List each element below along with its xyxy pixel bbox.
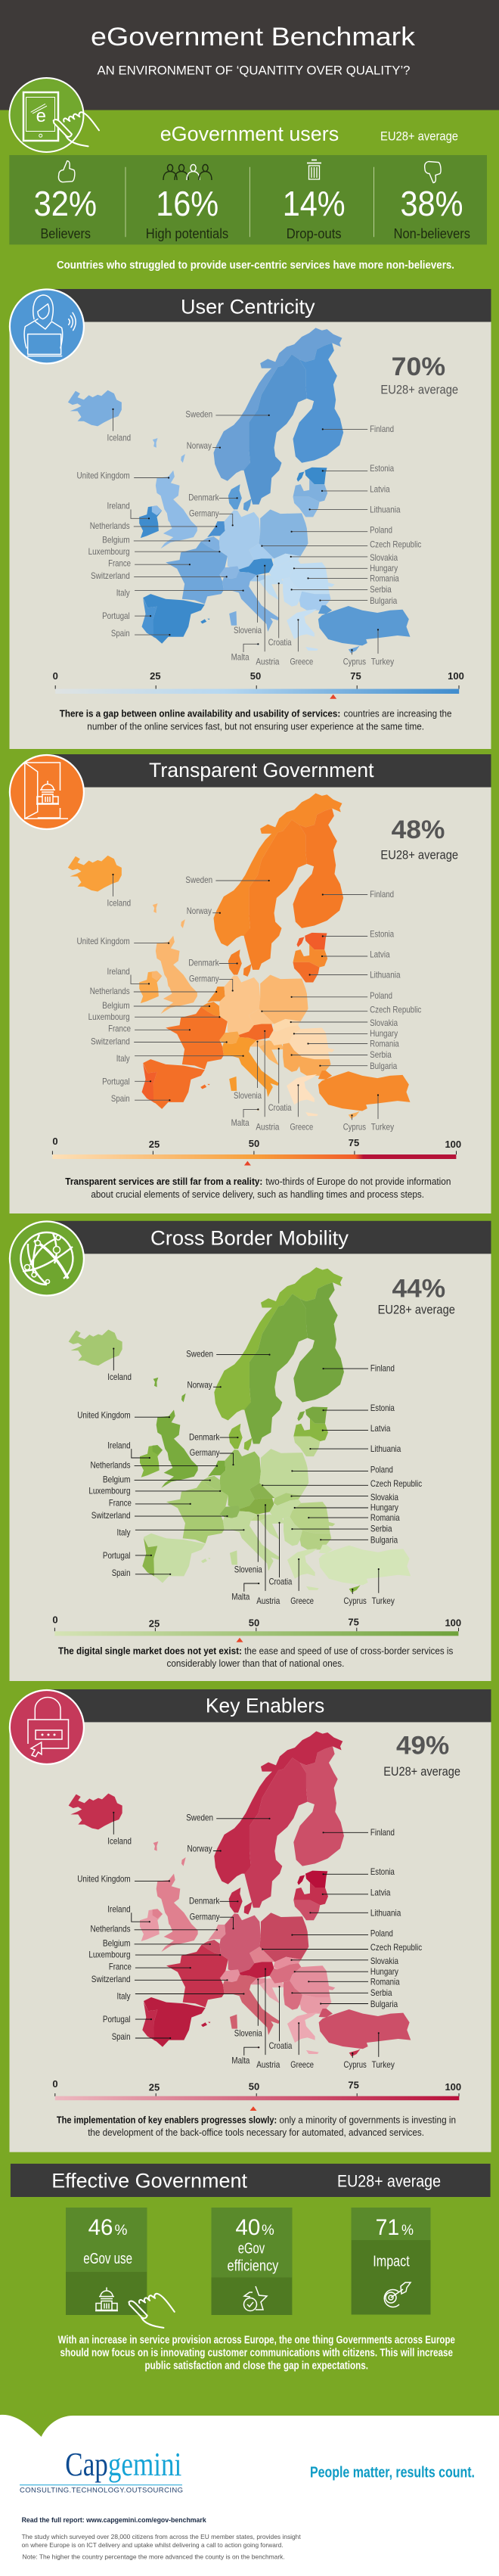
map: Europe key enablers: Slovenia [234,2028,262,2039]
icon: thumbs up [58,161,75,182]
map: Europe user centricity: Estonia [370,463,394,474]
map: Europe transparent government: Turkey [371,1121,394,1132]
map: Europe user centricity: Switzerland [91,570,130,581]
card: eGov efficiency: eGov [238,2241,265,2257]
card: Impact: 71 [376,2215,399,2240]
map: Europe transparent government: Hungary [370,1028,398,1039]
map: Europe user centricity: Bulgaria [370,595,398,606]
footer notes: Read the full report: www.capgemini.com/egov-benchmark [22,2516,206,2525]
stat: believers: Believers [41,226,91,241]
card: Impact: Impact [373,2254,410,2270]
map: Europe cross border mobility: Germany [190,1447,219,1458]
map: Europe transparent government: Serbia [370,1049,392,1060]
map: Europe cross border mobility: Iceland [107,1372,132,1382]
caption: gap between availability and usability: number of the online services fast, but not ensuring user experience at the same time. [87,720,424,732]
icon: trash bin [307,160,321,179]
map: Europe key enablers: Croatia [269,2040,293,2051]
map: Europe transparent government: Romania [370,1038,399,1049]
map: Europe key enablers: Romania [370,1976,400,1987]
map: Europe user centricity: Ireland [107,501,130,511]
map: Europe user centricity: Italy [116,588,130,598]
map: Europe key enablers: Iceland [107,1835,132,1846]
map: Europe cross border mobility: Italy [116,1527,130,1537]
map: Europe user centricity: Greece [290,656,313,667]
scale bar with average marker: 0 [53,670,58,682]
scale bar with average marker: 0 [52,1136,58,1147]
map: Europe key enablers: Sweden [186,1813,213,1823]
map: Europe transparent government: Finland [370,889,394,900]
map: Europe user centricity: United Kingdom [76,471,130,481]
map: Europe transparent government: Greece [290,1121,313,1132]
scale bar with average marker: 25 [149,1617,160,1629]
map: Europe cross border mobility: Belgium [103,1474,130,1484]
map: Europe user centricity: Romania [370,573,399,583]
map: Europe cross border mobility: Cyprus [343,1596,367,1606]
caption: digital single market: considerably lower than that of national ones. [166,1658,344,1669]
icon: tablet with pointing hand: e [36,106,46,126]
logo: Capgemini: Capgemini [65,2446,181,2483]
map: Europe user centricity: Portugal [102,611,130,621]
map: Europe cross border mobility: Romania [370,1512,400,1523]
stat: 70%: 70% [392,353,445,381]
map: Europe transparent government: Slovakia [370,1018,398,1028]
map: Europe user centricity: Malta [231,652,250,663]
map: Europe cross border mobility: Serbia [370,1524,392,1534]
stat: 48%: 48% [392,816,445,844]
heading: eGovernment users: eGovernment users [160,123,339,145]
map: Europe cross border mobility: Czech Republic [370,1478,422,1489]
subtitle: AN ENVIRONMENT OF ‘QUANTITY OVER QUALITY’? [97,64,410,78]
stat: drop-outs [283,184,346,241]
footer notes: Note: The higher the country percentage the more advanced the county is on the benchmark. [23,2553,285,2561]
card: Impact: % [401,2223,414,2239]
icon: tablet with pointing hand [9,78,99,152]
footer notes: The study which surveyed over 28,000 citizens from across the EU member states, provides insight [22,2533,301,2540]
header band [0,0,499,110]
map: Europe key enablers: Malta [231,2056,250,2066]
map: Europe transparent government: Norway [187,906,212,916]
map: Europe transparent government: Germany [189,974,219,984]
map: Europe cross border mobility: Austria [256,1596,280,1606]
map: Europe user centricity: Spain [111,628,130,639]
map: Europe key enablers: Luxembourg [88,1950,130,1960]
statement: user-centric services: Countries who struggled to provide user-centric services have more non-believers. [57,259,454,272]
map: Europe cross border mobility: Greece [290,1596,314,1606]
map: Europe key enablers: Ireland [107,1904,131,1915]
map: Europe transparent government: Luxembourg [88,1011,130,1022]
card: eGov efficiency: % [262,2223,274,2239]
scale bar with average marker: 75 [348,1616,359,1627]
map: Europe transparent government: Austria [256,1121,280,1132]
map: Europe user centricity: Poland [370,525,392,536]
map: Europe user centricity: Cyprus [343,656,366,667]
map: Europe transparent government: Czech Republic [370,1004,421,1015]
scale bar with average marker: 50 [249,1138,259,1149]
map: Europe cross border mobility: Lithuania [370,1443,401,1454]
footer notes [22,2516,301,2561]
map: Europe user centricity: Latvia [370,484,390,495]
caption: gap between availability and usability: There is a gap between online availability and usability of services: [60,707,340,719]
caption: transparent services: Transparent services are still far from a reality: [65,1176,262,1187]
label: EU28+ average: EU28+ average [383,1765,460,1779]
map: Europe key enablers: Norway [188,1844,212,1854]
map: Europe transparent government: Italy [116,1053,130,1064]
map: Europe key enablers: Portugal [103,2014,130,2024]
label: EU28+ average: EU28+ average [337,2171,441,2191]
map: Europe key enablers [69,1731,422,2070]
caption: digital single market: The digital single market does not yet exist: [58,1645,242,1656]
logo: Capgemini: CONSULTING.TECHNOLOGY.OUTSOURCING [20,2487,183,2495]
map: Europe user centricity [68,328,421,667]
map: Europe key enablers: Latvia [370,1887,391,1897]
map: Europe cross border mobility: Ireland [107,1440,131,1450]
caption: key enablers progress: only a minority of governments is investing in [280,2114,456,2125]
card: eGov efficiency [212,2208,292,2315]
map: Europe key enablers: Czech Republic [370,1942,422,1953]
icon: padlock with password field [10,1690,84,1764]
card: eGov use [66,2208,147,2315]
stat: believers [34,184,97,241]
caption: transparent services: about crucial elements of service delivery, such as handling times and process steps. [91,1189,424,1200]
map: Europe transparent government: Spain [111,1093,130,1104]
map: Europe transparent government: Ireland [107,966,130,977]
logo: Capgemini [20,2446,183,2495]
map: Europe cross border mobility: Spain [112,1568,130,1578]
map: Europe cross border mobility: Bulgaria [370,1535,398,1546]
map: Europe key enablers: Hungary [370,1966,398,1977]
scale bar with average marker: 100 [445,2081,461,2093]
scale bar with average marker: 0 [52,2078,58,2090]
scale bar with average marker: 0 [52,1614,58,1626]
map: Europe user centricity: Sweden [185,409,212,420]
map: Europe key enablers: Germany [190,1911,219,1922]
map: Europe user centricity: Turkey [371,656,394,667]
map: Europe key enablers: United Kingdom [77,1874,131,1885]
card: eGov efficiency: efficiency [227,2258,278,2275]
map: Europe transparent government: Belgium [102,1000,130,1011]
heading: User Centricity: User Centricity [181,295,315,318]
map: Europe user centricity: Austria [256,656,280,667]
closing statement: public satisfaction and close the gap in expectations. [145,2360,368,2372]
scale bar with average marker: 50 [249,1617,259,1629]
map: Europe transparent government: Malta [231,1117,250,1128]
scale bar with average marker [52,1614,461,1642]
panel: Cross Border Mobility [9,1221,491,1681]
panel: User Centricity [9,289,491,749]
map: Europe cross border mobility: Switzerland [91,1510,131,1521]
stat: high potentials: 16% [156,184,219,223]
map: Europe user centricity: Slovakia [370,552,398,563]
caption: key enablers progress: the development of the back-office tools necessary for automated, advanced services. [88,2127,424,2138]
stat: 49%: 49% [396,1732,449,1760]
map: Europe key enablers: Spain [112,2031,130,2042]
map: Europe cross border mobility: Slovakia [370,1492,398,1502]
map: Europe user centricity: Luxembourg [88,546,130,557]
map: Europe user centricity: Denmark [188,493,219,503]
panel: user statistics [9,155,487,244]
map: Europe cross border mobility: Sweden [186,1348,213,1359]
stat: believers: 32% [34,184,97,223]
map: Europe transparent government: Netherlands [90,986,130,996]
map: Europe user centricity: Slovenia [234,625,262,635]
map: Europe key enablers: Netherlands [91,1924,130,1934]
closing statement [58,2335,455,2372]
card: eGov use: eGov use [83,2251,132,2267]
icon: group of people [163,165,212,180]
map: Europe transparent government: France [108,1024,131,1034]
map: Europe cross border mobility: Croatia [269,1577,293,1587]
card: eGov efficiency: 40 [235,2215,260,2240]
map: Europe cross border mobility: Hungary [370,1502,398,1513]
map: Europe key enablers: Bulgaria [370,1999,398,2009]
heading: Key Enablers: Key Enablers [206,1694,324,1717]
map: Europe user centricity: Belgium [102,535,130,545]
map: Europe transparent government: Croatia [268,1102,292,1113]
label: EU28+ average: EU28+ average [380,383,458,396]
title: eGovernment Benchmark [91,23,416,51]
map: Europe cross border mobility: Estonia [370,1403,395,1413]
map: Europe cross border mobility: Denmark [189,1431,220,1442]
scale bar with average marker: 75 [349,1137,359,1148]
map: Europe user centricity: Germany [189,508,219,519]
map: Europe cross border mobility: Luxembourg [88,1486,130,1496]
scale bar with average marker [53,670,464,699]
label: EU28+ average: EU28+ average [380,849,458,862]
map: Europe transparent government: Bulgaria [370,1061,398,1071]
map: Europe transparent government: Iceland [107,898,131,909]
icon: network globe [10,1221,84,1295]
map: Europe key enablers: Poland [370,1928,393,1939]
map: Europe key enablers: France [109,1961,132,1972]
map: Europe cross border mobility [69,1267,422,1606]
map: Europe transparent government: Switzerland [91,1036,130,1046]
scale bar with average marker [52,2078,461,2111]
map: Europe key enablers: Austria [256,2059,280,2070]
map: Europe cross border mobility: France [109,1497,132,1508]
caption: key enablers progress [57,2114,456,2138]
map: Europe cross border mobility: Finland [370,1363,395,1374]
panel: Key Enablers [9,1689,491,2152]
map: Europe key enablers: Belgium [103,1938,130,1949]
stat: drop-outs: 14% [283,184,346,223]
icon: pointing hand [129,2294,175,2328]
map: Europe transparent government: Portugal [102,1076,130,1086]
map: Europe user centricity: Czech Republic [370,539,421,549]
map: Europe transparent government: Poland [370,990,392,1001]
scale bar with average marker: 100 [448,670,464,682]
map: Europe user centricity: Serbia [370,584,392,595]
map: Europe transparent government: Latvia [370,949,390,960]
map: Europe key enablers: Estonia [370,1866,395,1877]
card: eGov use: % [115,2223,128,2239]
heading: Effective Government: Effective Government [51,2170,247,2192]
icon: thumbs down [425,162,441,183]
map: Europe key enablers: Slovakia [370,1956,398,1966]
scale bar with average marker: 25 [149,2082,160,2093]
map: Europe user centricity: Lithuania [370,504,401,514]
map: Europe cross border mobility: Latvia [370,1423,391,1434]
map: Europe transparent government: Estonia [370,928,394,939]
map: Europe cross border mobility: Poland [370,1464,393,1474]
map: Europe cross border mobility: Portugal [103,1550,130,1561]
scale bar with average marker: 50 [250,670,261,682]
panel: Transparent Government [9,754,491,1213]
map: Europe cross border mobility: Malta [231,1591,250,1602]
scale bar with average marker: 75 [348,2079,359,2090]
caption: transparent services: two-thirds of Europe do not provide information [265,1176,451,1187]
map: Europe key enablers: Serbia [370,1987,392,1998]
map: Europe user centricity: Iceland [107,433,131,443]
map: Europe cross border mobility: Norway [188,1380,212,1391]
map: Europe transparent government: United Kingdom [76,936,130,946]
panel: Effective Government [11,2164,491,2328]
card: Impact [352,2208,431,2315]
map: Europe key enablers: Turkey [372,2059,395,2070]
icon: woman at laptop [10,289,84,363]
scale bar with average marker: 100 [445,1617,461,1629]
map: Europe key enablers: Finland [370,1827,395,1838]
map: Europe transparent government: Lithuania [370,969,401,980]
map: Europe cross border mobility: United Kingdom [77,1409,131,1420]
map: Europe transparent government [68,794,421,1132]
stat: non-believers: 38% [401,184,463,223]
scale bar with average marker: 25 [149,1139,160,1150]
label: EU28+ average: EU28+ average [380,130,458,144]
scale bar with average marker: 100 [445,1139,461,1150]
map: Europe transparent government: Sweden [185,875,212,885]
map: Europe cross border mobility: Slovenia [234,1565,262,1575]
map: Europe key enablers: Lithuania [370,1907,401,1918]
stat: non-believers: Non-believers [394,226,470,241]
map: Europe key enablers: Cyprus [343,2059,367,2070]
heading: Cross Border Mobility: Cross Border Mobility [150,1227,349,1250]
stat: drop-outs: Drop-outs [287,226,342,241]
caption: gap between availability and usability [60,707,451,732]
caption: transparent services [65,1176,451,1200]
map: Europe transparent government: Denmark [188,958,219,968]
stat: non-believers [394,184,470,241]
scale bar with average marker [52,1136,461,1165]
map: Europe user centricity: Norway [187,440,212,451]
map: Europe key enablers: Switzerland [91,1974,131,1984]
map: Europe key enablers: Greece [290,2059,314,2070]
map: Europe key enablers: Italy [116,1991,130,2002]
heading: Transparent Government: Transparent Government [149,759,374,782]
card: eGov use: 46 [88,2215,113,2240]
caption: key enablers progress: The implementation of key enablers progresses slowly: [57,2114,277,2125]
stat: 44%: 44% [392,1275,445,1304]
map: Europe cross border mobility: Netherlands [91,1460,130,1471]
map: Europe user centricity: France [108,558,131,569]
scale bar with average marker: 25 [150,670,161,682]
caption: digital single market: the ease and speed of use of cross-border services is [244,1645,454,1656]
map: Europe user centricity: Hungary [370,563,398,573]
label: EU28+ average: EU28+ average [378,1303,455,1316]
stat: high potentials: High potentials [146,226,228,241]
stat: high potentials [146,184,228,241]
caption: digital single market [58,1645,454,1669]
caption: gap between availability and usability: countries are increasing the [343,707,452,719]
map: Europe transparent government: Cyprus [343,1121,366,1132]
map: Europe user centricity: Croatia [268,637,292,648]
scale bar with average marker: 75 [350,670,361,682]
map: Europe user centricity: Finland [370,424,394,434]
footer notes: on where Europe is on ICT delivery and uptake whilst delivering a call to action going forward. [22,2541,284,2549]
scale bar with average marker: 50 [249,2080,259,2092]
map: Europe cross border mobility: Turkey [372,1596,395,1606]
map: Europe transparent government: Slovenia [234,1090,262,1101]
map: Europe user centricity: Netherlands [90,520,130,531]
map: Europe key enablers: Denmark [189,1896,220,1906]
icon: door opening on government building [10,755,84,829]
